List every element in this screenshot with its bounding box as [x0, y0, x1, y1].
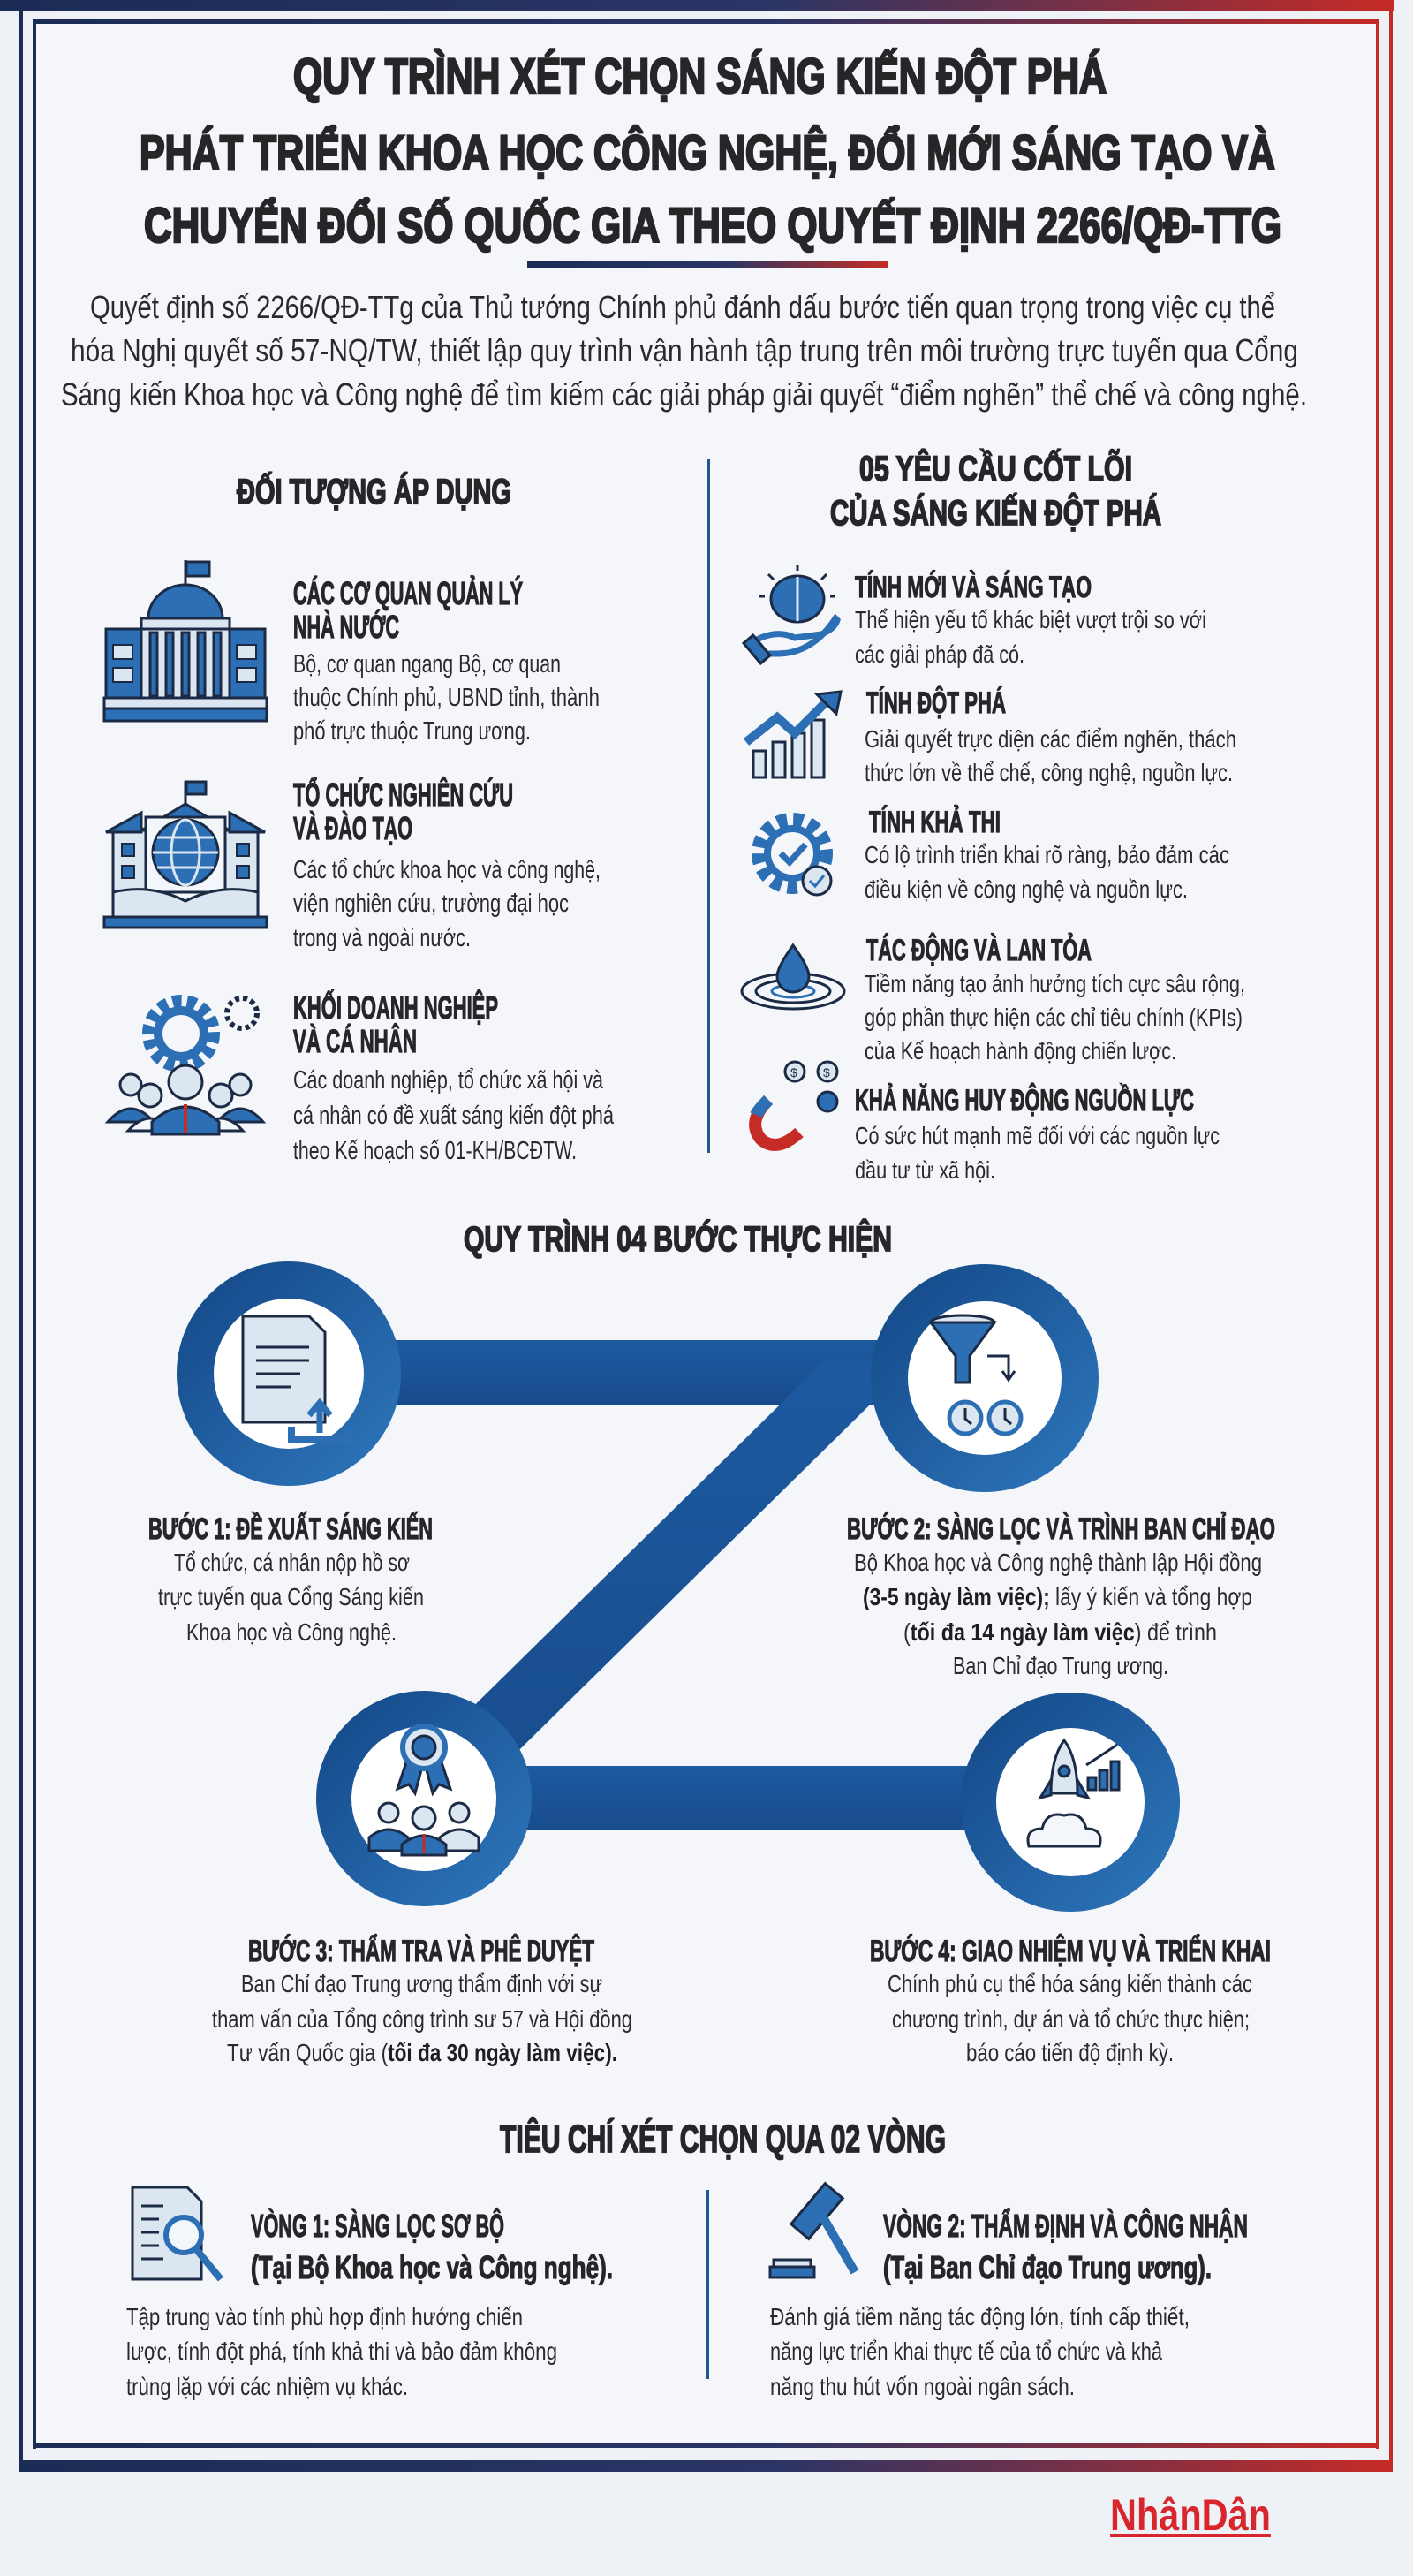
panel: vong 1: lược, tính đột phá, tính khả thi và bảo đảm không — [126, 2337, 557, 2365]
heading: quy trinh 04 buoc: QUY TRÌNH 04 BƯỚC THỰC HIỆN — [464, 1218, 892, 1259]
icon: growth chart — [746, 692, 841, 777]
heading: 05 yeu cau — [830, 448, 1161, 533]
chart: Z process path — [195, 1280, 1162, 1894]
icon: rocket and chart — [1028, 1740, 1119, 1846]
item: tinh moi: các giải pháp đã có. — [855, 640, 1024, 668]
item: tinh kha thi: điều kiện về công nghệ và nguồn lực. — [865, 875, 1188, 903]
step 2: (3-5 ngày làm việc); lấy ý kiến và tổng hợp — [863, 1583, 1252, 1610]
step 3: tham vấn của Tổng công trình sư 57 và Hội đồng — [212, 2005, 632, 2033]
step 3: Ban Chỉ đạo Trung ương thẩm định với sự — [241, 1970, 602, 1997]
icon: gears and people — [108, 998, 263, 1134]
step 4: báo cáo tiến độ định kỳ. — [966, 2039, 1174, 2066]
icon: document upload — [243, 1316, 349, 1440]
step 4 — [870, 1740, 1271, 2066]
step 2: Bộ Khoa học và Công nghệ thành lập Hội đồng — [854, 1549, 1262, 1576]
intro paragraph — [61, 289, 1307, 413]
panel: vong 1 — [126, 2187, 613, 2400]
step 2 — [847, 1315, 1275, 1679]
icon: gear check — [759, 820, 831, 895]
step 1: trực tuyến qua Cổng Sáng kiến — [158, 1583, 424, 1610]
heading: tieu chi xet chon: TIÊU CHÍ XÉT CHỌN QUA 02 VÒNG — [500, 2117, 946, 2161]
panel: vong 2 — [770, 2184, 1248, 2400]
item: tac dong: TÁC ĐỘNG VÀ LAN TỎA — [866, 933, 1092, 967]
item: to chuc nghien cuu: Các tổ chức khoa học và công nghệ, — [293, 856, 601, 884]
item: tac dong: của Kế hoạch hành động chiến lược. — [865, 1037, 1176, 1064]
icon: funnel and clocks — [931, 1315, 1021, 1434]
item: doanh nghiep: Các doanh nghiệp, tổ chức xã hội và — [293, 1066, 604, 1095]
step 4: Chính phủ cụ thể hóa sáng kiến thành các — [888, 1970, 1252, 1997]
panel: vong 2: Đánh giá tiềm năng tác động lớn, tính cấp thiết, — [770, 2303, 1190, 2330]
step 1 — [148, 1316, 433, 1646]
item: co quan quan ly: NHÀ NƯỚC — [293, 608, 399, 645]
item: co quan quan ly: thuộc Chính phủ, UBND tỉnh, thành — [293, 684, 600, 712]
step 1: Tổ chức, cá nhân nộp hồ sơ — [174, 1549, 410, 1576]
step 4: chương trình, dự án và tổ chức thực hiện; — [892, 2005, 1250, 2033]
heading: 05 yeu cau: 05 YÊU CẦU CỐT LÕI — [859, 448, 1132, 489]
item: to chuc nghien cuu — [104, 775, 601, 952]
panel: vong 2: (Tại Ban Chỉ đạo Trung ương). — [883, 2249, 1212, 2285]
item: tac dong: Tiềm năng tạo ảnh hưởng tích cực sâu rộng, — [865, 970, 1245, 997]
icon: medal and people — [369, 1726, 479, 1855]
icon: brain in hand — [744, 565, 837, 663]
item: tac dong — [742, 933, 1245, 1064]
item: tinh kha thi — [759, 806, 1229, 903]
step 3 — [212, 1726, 632, 2066]
step 1: BƯỚC 1: ĐỀ XUẤT SÁNG KIẾN — [148, 1512, 433, 1546]
item: tinh dot pha: Giải quyết trực diện các điểm nghẽn, thách — [865, 725, 1236, 753]
title — [140, 48, 1281, 253]
item: tinh moi — [744, 565, 1206, 668]
step 2: Ban Chỉ đạo Trung ương. — [953, 1652, 1168, 1679]
item: doanh nghiep: VÀ CÁ NHÂN — [293, 1022, 417, 1059]
item: co quan quan ly: Bộ, cơ quan ngang Bộ, cơ quan — [293, 650, 561, 678]
icon: gavel — [770, 2184, 855, 2277]
item: to chuc nghien cuu: viện nghiên cứu, trường đại học — [293, 890, 569, 918]
item: huy dong nguon luc: đầu tư từ xã hội. — [855, 1156, 995, 1184]
icon: magnet coins: $ — [823, 1065, 830, 1080]
item: to chuc nghien cuu: VÀ ĐÀO TẠO — [293, 810, 412, 846]
panel: doi tuong ap dung — [104, 471, 615, 1165]
item: doanh nghiep — [108, 989, 615, 1165]
step 3: BƯỚC 3: THẨM TRA VÀ PHÊ DUYỆT — [248, 1935, 594, 1968]
item: to chuc nghien cuu: TỔ CHỨC NGHIÊN CỨU — [293, 775, 513, 813]
step 2: (tối đa 14 ngày làm việc) để trình — [903, 1618, 1217, 1646]
panel: vong 2: năng thu hút vốn ngoài ngân sách. — [770, 2373, 1075, 2400]
panel: vong 1: Tập trung vào tính phù hợp định hướng chiến — [126, 2303, 523, 2330]
panel: vong 1: (Tại Bộ Khoa học và Công nghệ). — [251, 2249, 613, 2285]
item: tinh moi: Thể hiện yếu tố khác biệt vượt trội so với — [855, 606, 1206, 633]
item: tinh dot pha: TÍNH ĐỘT PHÁ — [866, 686, 1006, 720]
icon: water drop ripple — [742, 945, 844, 1009]
step 3: Tư vấn Quốc gia (tối đa 30 ngày làm việc). — [227, 2039, 617, 2066]
item: doanh nghiep: KHỐI DOANH NGHIỆP — [293, 989, 498, 1026]
item: doanh nghiep: theo Kế hoạch số 01-KH/BCĐTW. — [293, 1137, 577, 1165]
item: huy dong nguon luc — [755, 1062, 1220, 1184]
item: co quan quan ly: CÁC CƠ QUAN QUẢN LÝ — [293, 575, 523, 611]
item: tinh kha thi: Có lộ trình triển khai rõ ràng, bảo đảm các — [865, 841, 1229, 868]
item: huy dong nguon luc: Có sức hút mạnh mẽ đối với các nguồn lực — [855, 1122, 1220, 1149]
panel: 05 yeu cau — [742, 448, 1245, 1184]
item: huy dong nguon luc: KHẢ NĂNG HUY ĐỘNG NGUỒN LỰC — [855, 1083, 1194, 1118]
divider — [707, 459, 710, 1153]
panel: vong 1: VÒNG 1: SÀNG LỌC SƠ BỘ — [251, 2207, 504, 2244]
item: tinh moi: TÍNH MỚI VÀ SÁNG TẠO — [855, 571, 1092, 604]
item: to chuc nghien cuu: trong và ngoài nước. — [293, 924, 471, 952]
item: tinh dot pha — [746, 686, 1236, 786]
step 1: Khoa học và Công nghệ. — [186, 1618, 397, 1646]
icon: university — [104, 781, 267, 928]
title: QUY TRÌNH XÉT CHỌN SÁNG KIẾN ĐỘT PHÁ — [293, 48, 1107, 103]
icon: government building — [104, 560, 267, 721]
heading: 05 yeu cau: CỦA SÁNG KIẾN ĐỘT PHÁ — [830, 492, 1161, 533]
panel: vong 2: năng lực triển khai thực tế của tổ chức và khả — [770, 2337, 1162, 2365]
item: doanh nghiep: cá nhân có đề xuất sáng kiến đột phá — [293, 1102, 615, 1130]
item: tac dong: góp phần thực hiện các chỉ tiêu chính (KPIs) — [865, 1004, 1243, 1031]
panel: vong 1: trùng lặp với các nhiệm vụ khác. — [126, 2373, 408, 2400]
item: co quan quan ly — [104, 560, 600, 746]
item: tinh dot pha: thức lớn về thể chế, công nghệ, nguồn lực. — [865, 759, 1233, 786]
icon: magnet coins — [755, 1062, 837, 1145]
item: tinh kha thi: TÍNH KHẢ THI — [869, 806, 1001, 839]
item: co quan quan ly: phố trực thuộc Trung ương. — [293, 717, 531, 746]
logo: Nhan Dan: NhânDân — [1110, 2490, 1271, 2540]
heading: doi tuong: ĐỐI TƯỢNG ÁP DỤNG — [237, 471, 511, 511]
icon: magnet coins: $ — [790, 1065, 797, 1080]
icon: document magnifier — [132, 2187, 221, 2279]
